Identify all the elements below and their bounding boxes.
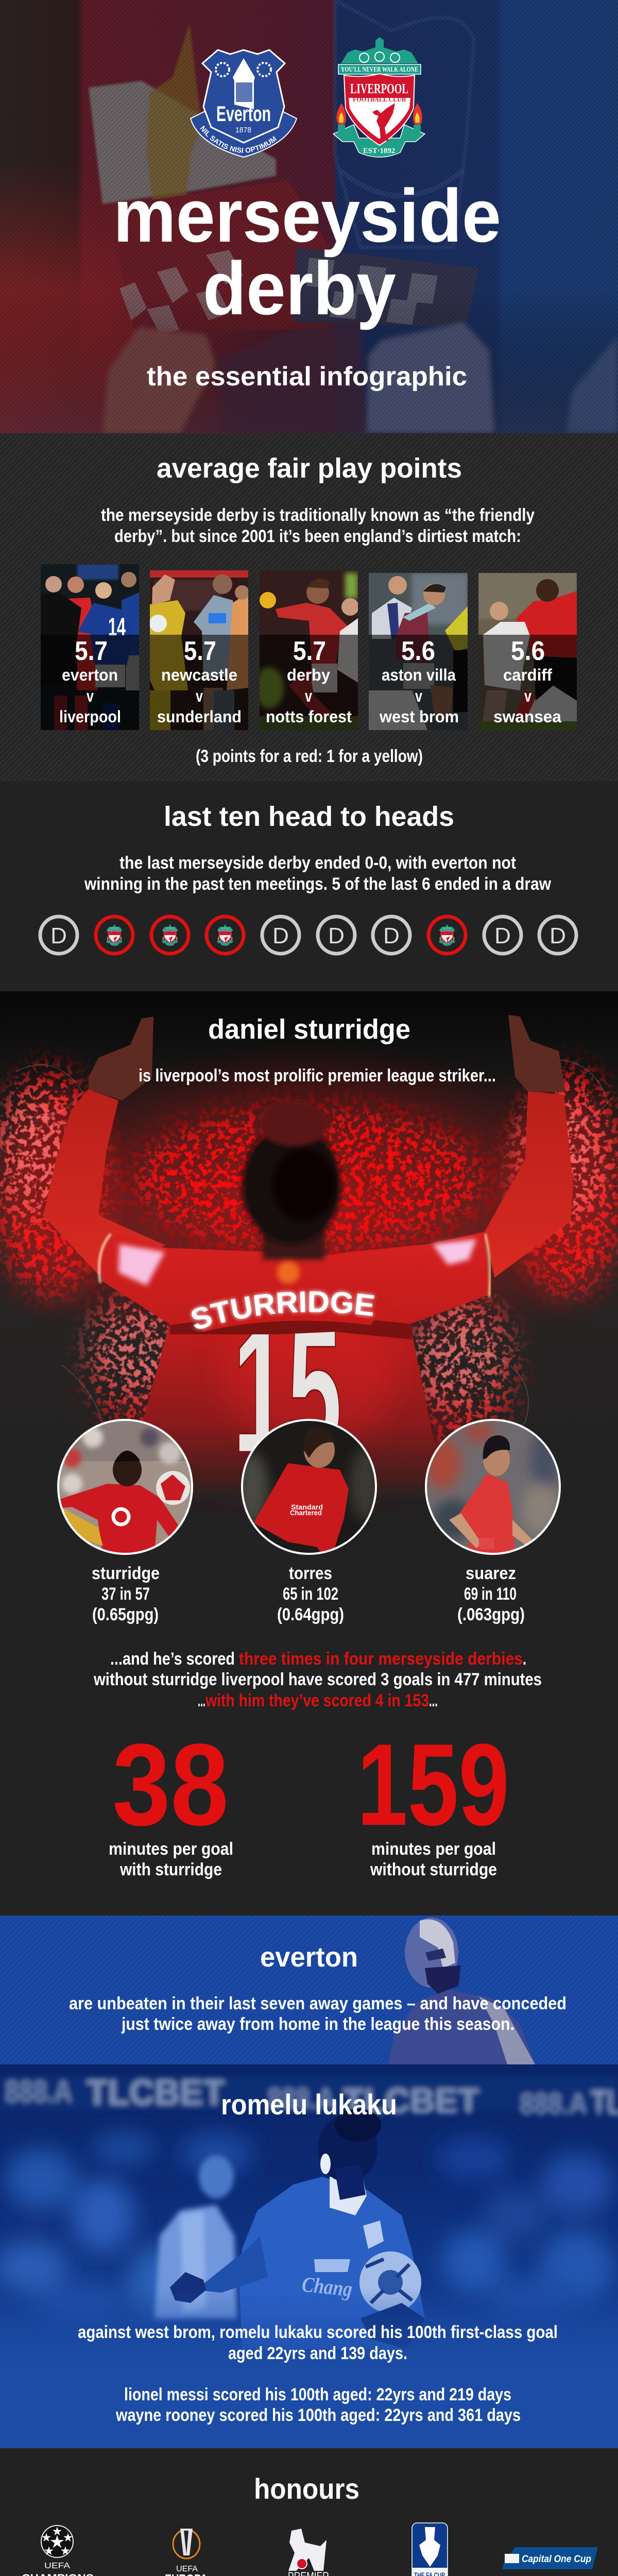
card captions: 5.6 aston villa: aston villa — [382, 666, 456, 684]
body text — [78, 2323, 558, 2425]
card captions: 5.7 derby — [266, 636, 352, 726]
stat: 159 minutes per goal: without sturridge — [370, 1860, 497, 1879]
panel: daniel sturridge artwork — [0, 991, 618, 1879]
card: everton v liverpool — [41, 564, 140, 730]
icon: everton crest: Everton — [216, 101, 271, 126]
icon: fa cup — [412, 2523, 448, 2576]
portrait: torres: Standard — [291, 1503, 323, 1511]
card captions: 5.6 cardiff: cardiff — [503, 666, 552, 684]
icon: liverpool crest: LIVERPOOL — [350, 81, 408, 96]
stadium hoarding: 888.A — [5, 2074, 72, 2109]
lukaku figure — [170, 2109, 425, 2349]
intro text: derby”. but since 2001 it’s been england’s dirtiest match: — [114, 527, 521, 546]
portrait captions: 69 in 110 — [464, 1584, 517, 1604]
shirt number — [170, 1290, 412, 1490]
portrait captions: suarez — [466, 1564, 516, 1583]
icon: champions league: ★ — [50, 2534, 64, 2551]
heading: everton — [260, 1942, 358, 1973]
icon: europa league: UEFA — [176, 2565, 198, 2573]
icon: capital one cup: Capital One Cup — [522, 2554, 591, 2565]
panel: everton — [0, 1916, 618, 2064]
title — [113, 174, 501, 330]
portrait: torres: Chartered — [290, 1509, 322, 1517]
panel: honours — [0, 2448, 618, 2576]
decorative wisps — [15, 1060, 608, 1443]
blurred crowd — [0, 2133, 613, 2324]
card captions: 5.7 newcastle: 5.7 — [184, 636, 216, 666]
stat: 38 minutes per goal: 38 — [112, 1719, 229, 1850]
stadium hoarding: 888.A — [268, 2082, 335, 2116]
portrait: sturridge — [58, 1420, 193, 1556]
card: derby v notts forest — [255, 570, 359, 730]
card captions: 5.6 cardiff — [493, 636, 561, 726]
icon: champions league: ★ — [53, 2526, 62, 2537]
icon: liverpool crest — [333, 37, 425, 157]
stat: 38 minutes per goal: with sturridge — [119, 1860, 222, 1879]
card captions: 5.7: everton — [62, 666, 118, 684]
icon: liverpool crest: YOU'LL NEVER WALK ALONE — [341, 66, 418, 74]
card captions: 5.7 derby: derby — [287, 666, 330, 684]
derby scoring text: without sturridge liverpool have scored 3 goals in 477 minutes — [93, 1670, 542, 1689]
card captions: 5.7 — [59, 636, 121, 726]
card captions: 5.7 derby: notts forest — [266, 707, 352, 726]
card captions: 5.7: v — [87, 687, 94, 705]
results row — [40, 917, 576, 954]
intro text: winning in the past ten meetings. 5 of the last 6 ended in a draw — [84, 874, 551, 894]
icon: premier league — [288, 2529, 329, 2576]
heading: daniel sturridge — [208, 1014, 410, 1045]
card captions: 5.7: liverpool — [59, 707, 121, 726]
panel: last ten head to heads — [0, 781, 618, 991]
card captions: 5.6 aston villa: 5.6 — [401, 636, 435, 666]
portrait: torres — [237, 1420, 381, 1555]
portrait captions — [92, 1564, 525, 1624]
card captions: 5.6 cardiff: swansea — [493, 707, 561, 726]
results row: D — [328, 923, 345, 948]
head — [242, 1100, 341, 1260]
card: cardiff v swansea — [478, 573, 577, 730]
derby scoring text: with him they’ve scored 4 in 153 — [205, 1691, 429, 1710]
body text: wayne rooney scored his 100th aged: 22yrs and 361 days — [115, 2405, 521, 2425]
derby scoring text: . — [523, 1649, 526, 1669]
icon: everton crest: 1878 — [235, 126, 251, 134]
body text: aged 22yrs and 139 days. — [228, 2344, 407, 2363]
derby scoring text: three times in four merseyside derbies — [239, 1649, 523, 1669]
card captions: 5.7: 5.7 — [75, 636, 108, 666]
icon: champions league: ★ — [44, 2546, 54, 2557]
portrait captions: (0.65gpg) — [92, 1605, 159, 1624]
stat: 38 minutes per goal: minutes per goal — [109, 1839, 233, 1859]
icon: champions league: ★ — [61, 2546, 70, 2557]
shirt name: STURRIDGE — [188, 1288, 377, 1332]
derby scoring text — [93, 1649, 542, 1710]
card captions: 5.6 aston villa — [379, 636, 459, 726]
card captions: 5.7 newcastle: sunderland — [157, 707, 242, 726]
intro text — [84, 853, 551, 894]
portrait captions: (.063gpg) — [457, 1605, 525, 1624]
icon: europa league — [165, 2529, 208, 2576]
card captions: 5.7 newcastle: v — [196, 687, 203, 705]
card captions: 5.6 cardiff: 5.6 — [511, 636, 545, 666]
body text — [69, 1994, 566, 2034]
card captions: 5.6 cardiff: v — [524, 687, 531, 705]
stat: 159 minutes per goal: minutes per goal — [371, 1839, 496, 1859]
background player — [154, 2155, 237, 2318]
intro text: is liverpool’s most prolific premier league striker... — [139, 1066, 496, 1086]
card captions: 5.7 newcastle: newcastle — [161, 666, 237, 684]
portrait captions: sturridge — [92, 1564, 160, 1583]
portrait: suarez — [425, 1420, 561, 1555]
derby scoring text: ... — [198, 1691, 205, 1710]
derby scoring text: ...and he’s scored — [110, 1649, 235, 1669]
subtitle: the essential infographic — [147, 362, 467, 392]
derby scoring text: ... — [429, 1691, 438, 1710]
intro text: the merseyside derby is traditionally known as “the friendly — [101, 505, 535, 525]
results row: D — [550, 923, 566, 948]
portrait captions: torres — [289, 1564, 332, 1583]
icon: champions league: ★ — [63, 2532, 73, 2544]
stat: 159 minutes per goal: 159 — [357, 1719, 509, 1850]
icon: capital one cup — [503, 2547, 598, 2569]
lukaku figure: Chang — [301, 2273, 353, 2301]
intro text — [101, 505, 535, 546]
shirt — [98, 1232, 491, 1502]
heading: average fair play points — [157, 453, 462, 484]
portrait captions: 37 in 57 — [101, 1584, 150, 1604]
card: newcastle v sunderland — [149, 570, 249, 730]
body text: just twice away from home in the league this season. — [121, 2014, 514, 2034]
portrait captions: (0.64gpg) — [277, 1605, 344, 1624]
shirt number: 15 — [233, 1290, 342, 1490]
results row: D — [272, 923, 289, 948]
body text: are unbeaten in their last seven away games – and have conceded — [69, 1994, 566, 2013]
card captions: 5.6 aston villa: west brom — [379, 707, 459, 726]
stadium hoarding: 888.A — [520, 2087, 587, 2122]
title: merseyside — [113, 174, 501, 258]
icon: liverpool crest: EST·1892 — [363, 147, 395, 155]
stadium hoarding — [1, 2075, 618, 2119]
footnote: (3 points for a red: 1 for a yellow) — [196, 747, 423, 766]
arms — [43, 1015, 573, 1278]
intro text: the last merseyside derby ended 0-0, with everton not — [119, 853, 516, 873]
body text: against west brom, romelu lukaku scored his 100th first-class goal — [78, 2323, 558, 2342]
heading: romelu lukaku — [221, 2088, 397, 2121]
panel: romelu lukaku — [0, 2064, 618, 2448]
icon: liverpool crest: FOOTBALL CLUB — [353, 95, 406, 103]
results row: D — [494, 923, 511, 948]
icon: everton crest — [190, 49, 298, 158]
stat: 159 minutes per goal — [357, 1719, 509, 1879]
portrait captions: 65 in 102 — [283, 1584, 338, 1604]
icon: champions league: ★ — [42, 2532, 51, 2544]
results row: D — [50, 923, 67, 948]
heading: last ten head to heads — [164, 801, 454, 832]
title: derby — [203, 246, 396, 330]
card captions: 5.7 derby: v — [305, 687, 312, 705]
card: everton v liverpool: 14 — [108, 613, 126, 641]
glowing sleeves — [99, 1234, 490, 1297]
body text: lionel messi scored his 100th aged: 22yrs and 219 days — [124, 2385, 511, 2404]
panel: average fair play points — [0, 433, 618, 781]
icon: everton crest: NIL SATIS NISI OPTIMUM — [200, 126, 277, 153]
card captions: 5.7 derby: 5.7 — [293, 636, 326, 666]
panel: hero header — [0, 0, 618, 433]
card: aston villa v west brom — [369, 573, 468, 730]
image: keeper — [388, 1918, 535, 2064]
stadium hoarding: TLCBET — [343, 2081, 479, 2121]
card captions: 5.6 aston villa: v — [415, 687, 422, 705]
icon: champions league — [22, 2526, 94, 2576]
stadium hoarding: TLCBET — [87, 2072, 225, 2112]
heading: honours — [254, 2472, 359, 2505]
icon: champions league: UEFA — [44, 2562, 70, 2570]
card captions: 5.7 newcastle — [157, 636, 242, 726]
results row: D — [383, 923, 400, 948]
